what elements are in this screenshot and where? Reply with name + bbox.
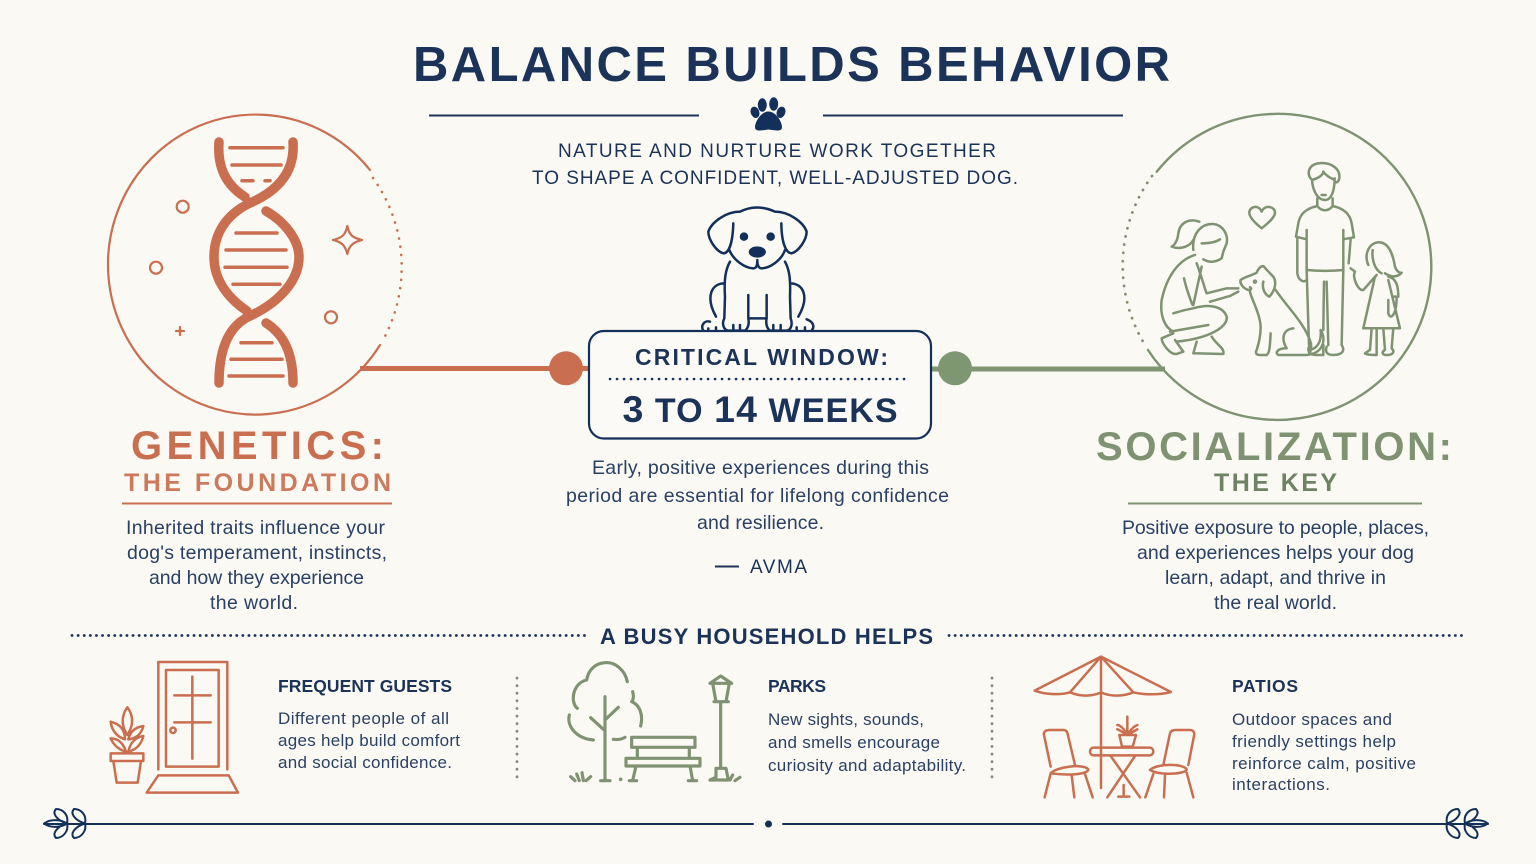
- heading: genetics: THE FOUNDATION: [124, 469, 391, 497]
- heading: socialization: SOCIALIZATION:: [1096, 425, 1452, 469]
- heading: socialization: [1096, 425, 1452, 504]
- text: parks: and smells encourage: [768, 733, 940, 752]
- icon: patio umbrella, table and chairs: [1035, 657, 1194, 797]
- text: parks: curiosity and adaptability.: [768, 756, 966, 775]
- text: socialization description: the real world.: [1214, 592, 1337, 614]
- subtitle: TO SHAPE A CONFIDENT, WELL-ADJUSTED DOG.: [532, 168, 1018, 189]
- text: socialization description: and experiences helps your dog: [1137, 542, 1414, 564]
- text: genetics description: dog's temperament, instincts,: [127, 542, 387, 564]
- text: parks: New sights, sounds,: [768, 710, 924, 729]
- text: parks: [768, 676, 966, 775]
- text: genetics description: [126, 517, 387, 614]
- heading: socialization: THE KEY: [1214, 469, 1337, 497]
- footer ornament: [44, 809, 1488, 838]
- text: genetics description: and how they experience: [149, 567, 364, 589]
- center quote: period are essential for lifelong confidence: [566, 485, 949, 507]
- panel: critical window: [589, 331, 931, 438]
- icon: DNA helix: [214, 142, 299, 383]
- text: frequent guests: [278, 676, 460, 772]
- text: genetics description: Inherited traits influence your: [126, 517, 386, 539]
- critical window label: CRITICAL WINDOW:: [635, 344, 888, 370]
- icon: tree, bench and lamp: [569, 663, 740, 781]
- panel: genetics circle with DNA icon: [108, 115, 402, 415]
- title divider with paw icon: [429, 97, 1123, 131]
- panel: socialization circle with family and dog: [1123, 114, 1431, 420]
- quote attribution: AVMA: [750, 557, 807, 578]
- text: patios: PATIOS: [1232, 676, 1298, 696]
- subtitle: [532, 141, 1018, 189]
- text: frequent guests: ages help build comfort: [278, 731, 460, 750]
- critical window value: 3 TO 14 WEEKS: [622, 388, 898, 430]
- text: frequent guests: and social confidence.: [278, 753, 452, 772]
- text: frequent guests: FREQUENT GUESTS: [278, 676, 452, 696]
- text: patios: reinforce calm, positive: [1232, 754, 1416, 773]
- icon: family and dog line art: [1161, 163, 1402, 355]
- center quote: and resilience.: [697, 512, 824, 534]
- text: patios: [1232, 676, 1416, 794]
- connector: socialization to critical window: [930, 351, 1165, 385]
- text: socialization description: [1122, 517, 1429, 614]
- title: BALANCE BUILDS BEHAVIOR: [413, 38, 1170, 92]
- text: socialization description: learn, adapt, and thrive in: [1165, 567, 1386, 589]
- text: genetics description: the world.: [210, 592, 298, 614]
- heading: genetics: [122, 424, 392, 504]
- text: patios: interactions.: [1232, 775, 1330, 794]
- text: socialization description: Positive exposure to people, places,: [1122, 517, 1429, 539]
- text: parks: PARKS: [768, 676, 826, 696]
- connector: genetics to critical window: [360, 351, 590, 385]
- center quote: [566, 457, 949, 534]
- subtitle: NATURE AND NURTURE WORK TOGETHER: [558, 141, 996, 162]
- text: frequent guests: Different people of all: [278, 709, 449, 728]
- icon: door and plant: [111, 662, 238, 793]
- heading: genetics: GENETICS:: [131, 424, 384, 468]
- center quote: Early, positive experiences during this: [592, 457, 929, 479]
- icon: puppy: [702, 207, 813, 331]
- section heading: a busy household helps: A BUSY HOUSEHOLD HELPS: [600, 624, 933, 649]
- text: patios: friendly settings help: [1232, 732, 1396, 751]
- icon: sparkles and dots: [150, 201, 362, 335]
- text: patios: Outdoor spaces and: [1232, 710, 1392, 729]
- quote attribution: [715, 557, 807, 578]
